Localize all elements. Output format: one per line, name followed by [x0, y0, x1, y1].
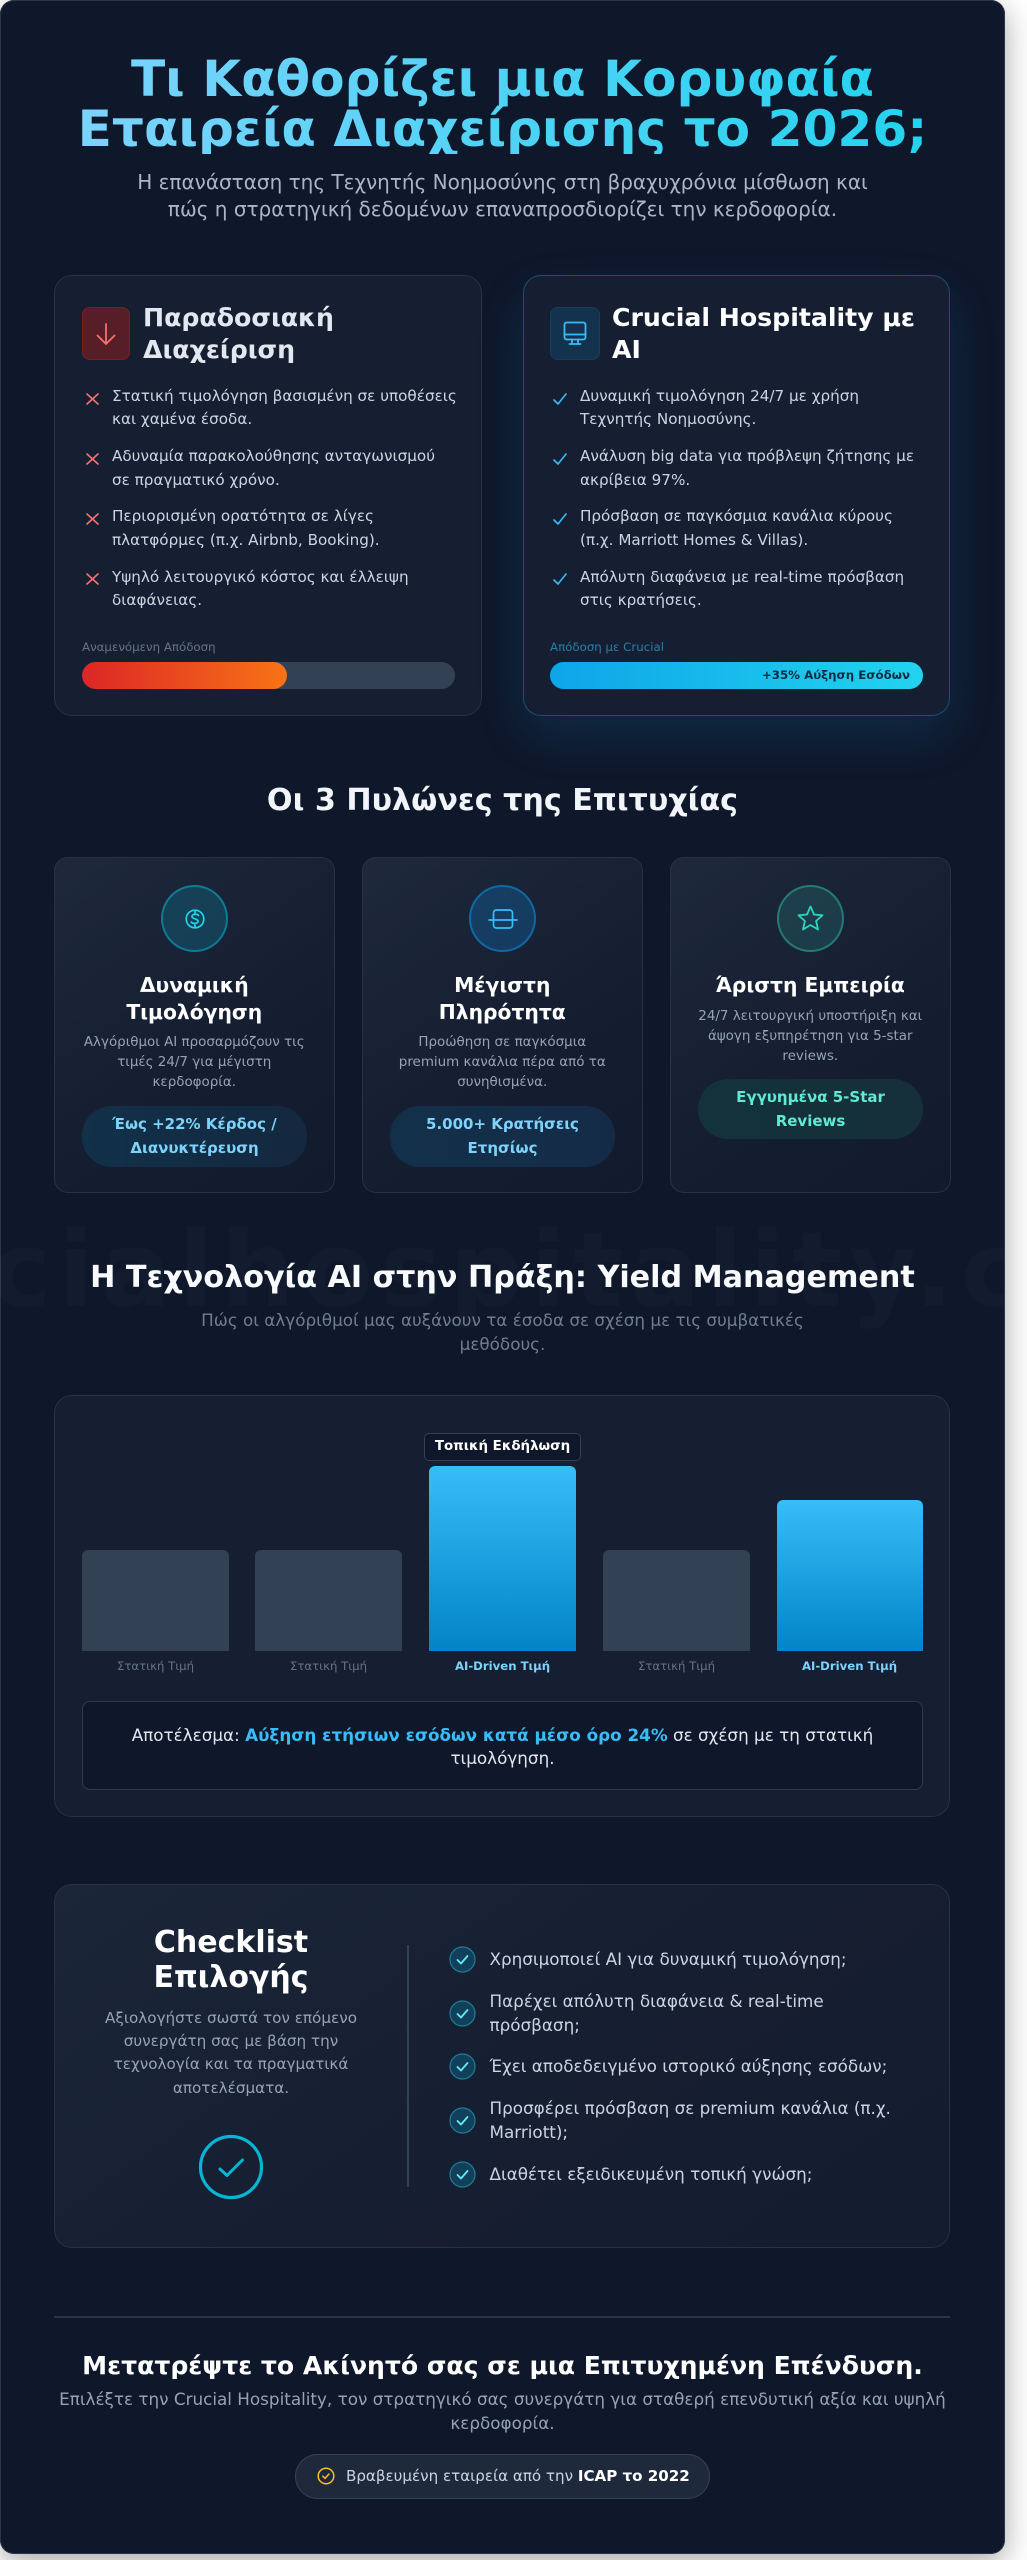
stat pill: Έως +22% Κέρδος / [112, 1115, 277, 1133]
icon: x mark [86, 453, 99, 465]
item: Προσφέρει πρόσβαση σε premium κανάλια (π.χ. [490, 2098, 891, 2118]
checklist title: Επιλογής [153, 1960, 309, 1995]
heading: Διαχείριση [143, 334, 295, 364]
heading: AI [612, 334, 641, 364]
title: Δυναμική [140, 972, 249, 996]
icon: monitor [550, 307, 600, 360]
item: Έχει αποδεδειγμένο ιστορικό αύξησης εσόδων; [490, 2056, 887, 2076]
icon: star [777, 885, 844, 952]
title: Τιμολόγηση [126, 1000, 262, 1024]
bar: static 1 [82, 1550, 229, 1651]
item [112, 447, 435, 488]
description: premium κανάλια πέρα από τα [399, 1055, 606, 1070]
item [112, 387, 457, 428]
bar label: Αναμενόμενη Απόδοση [82, 640, 216, 654]
checklist title: Checklist [154, 1925, 308, 1960]
list [553, 387, 914, 609]
heading: pillars: Οι 3 Πυλώνες της Επιτυχίας [267, 783, 738, 818]
checklist items [449, 1946, 891, 2188]
icon: x mark [86, 393, 99, 405]
checklist title [153, 1925, 309, 1995]
heading [143, 303, 334, 364]
stat pill: Ετησίως [468, 1138, 537, 1156]
stat pill: Διανυκτέρευση [130, 1138, 259, 1156]
description: κερδοφορία. [153, 1075, 236, 1090]
item [580, 387, 859, 428]
icon: large check circle [198, 2134, 264, 2200]
description: 24/7 λειτουργική υποστήριξη και [698, 1009, 922, 1024]
heading: Παραδοσιακή [143, 303, 334, 332]
stat pill [698, 1079, 923, 1139]
bar label: Απόδοση με Crucial [550, 640, 664, 654]
stat pill [82, 1106, 307, 1167]
title [126, 972, 262, 1024]
icon: check badge [449, 2053, 476, 2080]
stat pill: Reviews [776, 1112, 845, 1130]
performance bar [550, 662, 923, 689]
checklist description: Αξιολογήστε σωστά τον επόμενο [105, 2009, 357, 2027]
result callout [82, 1701, 923, 1790]
description: Προώθηση σε παγκόσμια [418, 1035, 586, 1050]
bar chart [82, 1433, 923, 1673]
tooltip: Τοπική Εκδήλωση [435, 1439, 570, 1454]
heading: Crucial Hospitality με [612, 303, 915, 332]
item: Χρησιμοποιεί AI για δυναμική τιμολόγηση; [490, 1949, 846, 1969]
icon: check badge [449, 2000, 476, 2027]
description [84, 1035, 305, 1090]
item: και χαμένα έσοδα. [112, 410, 252, 428]
icon: booking [469, 885, 536, 952]
footer text: Επιλέξτε την Crucial Hospitality, τον στρατηγικό σας συνεργάτη για σταθερή επενδυτική αξία και υψηλή [59, 2389, 946, 2409]
footer heading: Μετατρέψτε το Ακίνητό σας σε μια Επιτυχημένη Επένδυση. [82, 2351, 923, 2380]
item [490, 2098, 891, 2142]
subheading [201, 1310, 804, 1354]
heading [612, 303, 915, 364]
item: διαφάνειας. [112, 591, 202, 609]
title: Τι Καθορίζει μια Κορυφαία [131, 49, 874, 108]
footer text [59, 2389, 946, 2433]
subtitle [137, 170, 868, 221]
item: Περιορισμένη ορατότητα σε λίγες [112, 507, 374, 525]
item: Ανάλυση big data για πρόβλεψη ζήτησης με [580, 447, 914, 465]
item: Στατική τιμολόγηση βασισμένη σε υποθέσεις [112, 387, 457, 405]
item: Απόλυτη διαφάνεια με real-time πρόσβαση [580, 568, 904, 586]
panel: crucial hospitality [523, 275, 950, 716]
description [698, 1009, 922, 1064]
award badge [295, 2454, 710, 2499]
bar label: Στατική Τιμή [117, 1659, 194, 1673]
panel: maximum occupancy [362, 857, 642, 1193]
description: συνηθισμένα. [457, 1075, 547, 1090]
icon: check [553, 513, 567, 525]
icon: check [553, 453, 567, 465]
bar: AI 1 [429, 1466, 576, 1651]
stat pill: Εγγυημένα 5-Star [736, 1088, 885, 1106]
subheading: μεθόδους. [460, 1334, 545, 1354]
title: Πληρότητα [439, 1000, 566, 1024]
bar label: Στατική Τιμή [290, 1659, 367, 1673]
checklist description: αποτελέσματα. [173, 2079, 289, 2097]
panel: best experience [670, 857, 950, 1193]
icon: dollar [161, 885, 228, 952]
stat pill: 5.000+ Κρατήσεις [426, 1115, 579, 1133]
checklist description: τεχνολογία και τα πραγματικά [114, 2055, 348, 2073]
performance bar [82, 662, 455, 689]
result callout: Αποτέλεσμα: Αύξηση ετήσιων εσόδων κατά μέσο όρο 24% σε σχέση με τη στατική [132, 1724, 873, 1744]
checklist description [105, 2009, 357, 2097]
title: Εταιρεία Διαχείρισης το 2026; [78, 99, 927, 158]
description: reviews. [782, 1049, 838, 1064]
bar label: AI-Driven Τιμή [802, 1659, 897, 1673]
performance bar: +35% Αύξηση Εσόδων [762, 668, 910, 682]
icon: check badge [449, 1946, 476, 1973]
item: Πρόσβαση σε παγκόσμια κανάλια κύρους [580, 507, 893, 525]
title: Μέγιστη [454, 972, 550, 996]
icon: check [553, 573, 567, 585]
bar: AI 2 [776, 1500, 923, 1651]
panel: bar chart [54, 1395, 950, 1817]
bar: static 3 [603, 1550, 750, 1651]
description: τιμές 24/7 για μέγιστη [117, 1055, 271, 1070]
icon: arrow down [82, 307, 130, 360]
item: ακρίβεια 97%. [580, 470, 690, 488]
bar: static 2 [255, 1550, 402, 1651]
item [580, 568, 904, 609]
subheading: Πώς οι αλγόριθμοί μας αυξάνουν τα έσοδα σε σχέση με τις συμβατικές [201, 1310, 804, 1330]
item: Διαθέτει εξειδικευμένη τοπική γνώση; [490, 2164, 812, 2184]
item: Marriott); [490, 2122, 568, 2142]
panel: checklist [54, 1884, 950, 2248]
item: στις κρατήσεις. [580, 591, 702, 609]
stat pill [390, 1106, 615, 1167]
item [490, 1991, 824, 2035]
bar label: Στατική Τιμή [638, 1659, 715, 1673]
item: πρόσβαση; [490, 2015, 580, 2035]
description [399, 1035, 606, 1090]
title [439, 972, 566, 1024]
item [580, 507, 893, 549]
item: πλατφόρμες (π.χ. Airbnb, Booking). [112, 531, 380, 549]
checklist description: συνεργάτη σας με βάση την [124, 2032, 338, 2050]
item [112, 568, 409, 609]
icon: x mark [86, 513, 99, 525]
subtitle: πώς η στρατηγική δεδομένων επαναπροσδιορίζει την κερδοφορία. [168, 197, 837, 221]
item: σε πραγματικό χρόνο. [112, 470, 280, 488]
subtitle: Η επανάσταση της Τεχνητής Νοημοσύνης στη βραχυχρόνια μίσθωση και [137, 170, 868, 194]
result callout: τιμολόγηση. [450, 1748, 555, 1768]
item: Τεχνητής Νοημοσύνης. [580, 410, 756, 428]
panel: traditional management [54, 275, 482, 716]
icon: check [553, 393, 567, 405]
list [86, 387, 457, 609]
tooltip [424, 1433, 581, 1461]
panel: dynamic pricing [54, 857, 334, 1193]
title [70, 54, 935, 154]
item: Αδυναμία παρακολούθησης ανταγωνισμού [112, 447, 435, 465]
icon: award check [317, 2467, 335, 2485]
item: Δυναμική τιμολόγηση 24/7 με χρήση [580, 387, 859, 405]
item: Παρέχει απόλυτη διαφάνεια & real-time [490, 1991, 824, 2011]
footer text: κερδοφορία. [450, 2413, 555, 2433]
icon: check badge [449, 2161, 476, 2188]
divider [407, 1945, 408, 2187]
title: Άριστη Εμπειρία [716, 972, 905, 996]
icon: check badge [449, 2107, 476, 2134]
description: Αλγόριθμοι AI προσαρμόζουν τις [84, 1035, 305, 1050]
badge text: Βραβευμένη εταιρεία από την ICAP το 2022 [346, 2467, 690, 2485]
description: άψογη εξυπηρέτηση για 5-star [708, 1029, 913, 1044]
item [112, 507, 380, 549]
item: Υψηλό λειτουργικό κόστος και έλλειψη [112, 568, 409, 586]
item: (π.χ. Marriott Homes & Villas). [580, 531, 808, 549]
icon: x mark [86, 573, 99, 585]
item [580, 447, 914, 488]
bar label: AI-Driven Τιμή [455, 1659, 550, 1673]
heading: AI technology: Η Τεχνολογία AI στην Πράξη: Yield Management [90, 1260, 915, 1295]
